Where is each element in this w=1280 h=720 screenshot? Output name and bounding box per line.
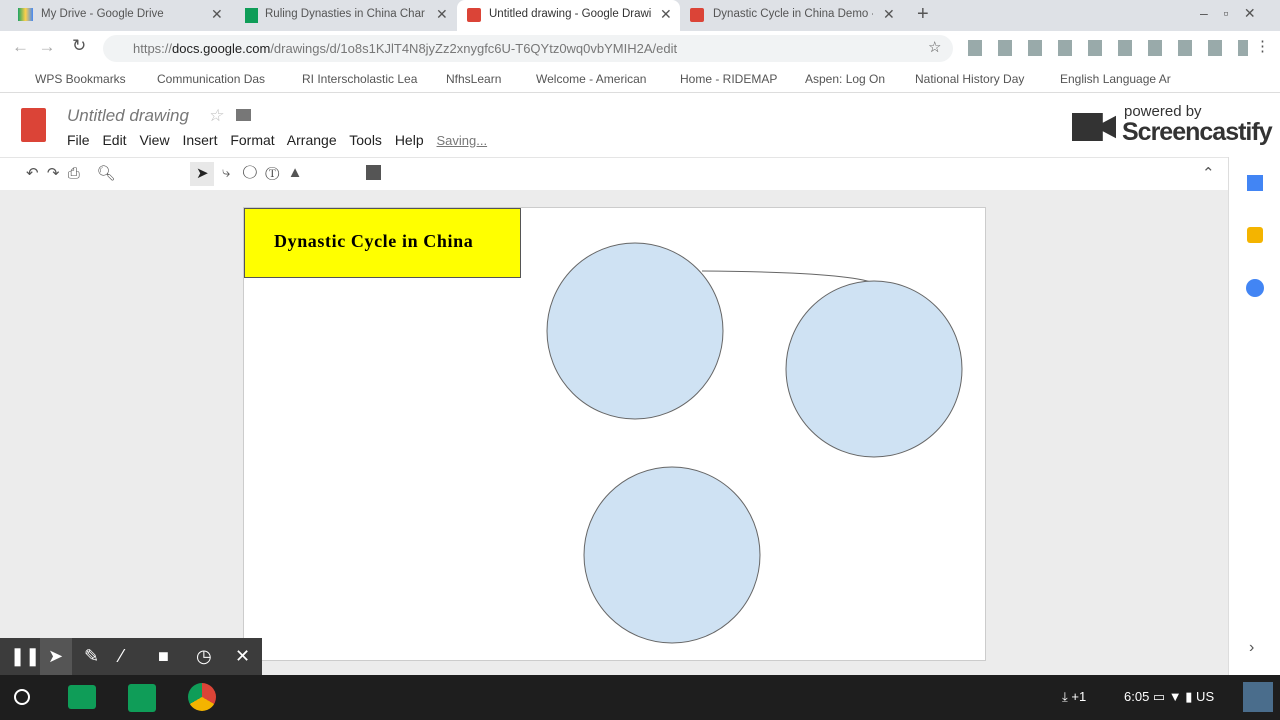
circle 1: [547, 243, 723, 419]
address bar: ← →: [12, 37, 55, 56]
docs header: [0, 93, 1280, 157]
toolbar: [0, 157, 1228, 190]
toolbar: ➤: [196, 165, 209, 182]
screencastify toolbar: ⁄: [120, 646, 123, 666]
tab: active: [457, 0, 680, 31]
taskbar: [0, 675, 1280, 720]
right side panel: ›: [1249, 639, 1254, 656]
circle 3: [584, 467, 760, 643]
bookmarks bar: National History Day: [915, 72, 1024, 86]
title box: [244, 208, 521, 278]
tab bar: [0, 0, 1280, 31]
address bar: ↻: [72, 36, 86, 55]
tab: ruling dynasties: Ruling Dynasties in China Chart: [265, 8, 425, 20]
bookmarks bar: Home - RIDEMAP: [680, 72, 777, 86]
title: untitled drawing: Untitled drawing ☆: [67, 106, 223, 125]
screencastify toolbar: ➤: [48, 646, 63, 666]
screencastify toolbar: ◷: [196, 646, 212, 666]
tab: active: ✕: [660, 6, 672, 22]
tab: my drive: My Drive - Google Drive: [41, 8, 164, 20]
bookmarks bar: Welcome - American: [536, 72, 646, 86]
screencastify toolbar: ✕: [235, 646, 250, 666]
bookmarks bar: WPS Bookmarks: [35, 72, 126, 86]
menu: File Edit View Insert Format Arrange Tools Help Saving...: [67, 132, 487, 148]
icon: drawings logo: [21, 108, 46, 142]
screencastify watermark: [1072, 103, 1272, 146]
toolbar: ⌃: [1202, 165, 1215, 182]
taskbar: 6:05 ▭ ▼ ▮ US: [1124, 689, 1214, 704]
address bar: ☆: [928, 39, 941, 56]
address bar: https://docs.google.com/drawings/d/1o8s1KJlT4N8jyZz2xnygfc6U-T6QYtz0wq0vbYMIH2A/edit: [133, 41, 677, 56]
title box: Dynastic Cycle in China: [274, 231, 473, 251]
toolbar: ⤷ ◯ Ⓣ ▲: [222, 164, 302, 181]
tab: dynastic cycle demo: ✕: [883, 6, 895, 22]
bookmarks bar: Communication Das: [157, 72, 265, 86]
screencastify watermark: powered by: [1124, 103, 1202, 120]
bookmarks bar: RI Interscholastic Lea: [302, 72, 417, 86]
tab: dynastic cycle demo: [690, 6, 895, 22]
screencastify toolbar: ✎: [84, 646, 99, 666]
screencastify toolbar: ■: [158, 646, 169, 666]
tab bar: – ▫ ✕: [1200, 5, 1256, 21]
bookmarks bar: NfhsLearn: [446, 72, 501, 86]
bookmarks bar: [0, 65, 1280, 93]
canvas: [243, 207, 986, 661]
bookmarks bar: Aspen: Log On: [805, 72, 885, 86]
address bar: [0, 31, 1280, 65]
connector line: [702, 271, 874, 283]
screencastify toolbar: ❚❚: [10, 646, 40, 666]
taskbar: ⤓ +1: [1062, 689, 1086, 704]
toolbar: ↶ ↷ ⎙ 🔍︎: [26, 165, 116, 182]
right side panel: [1228, 157, 1280, 675]
diagram: circles: [546, 242, 962, 644]
screencastify watermark: Screencastify: [1122, 118, 1272, 146]
tab: ruling dynasties: [245, 6, 448, 23]
screencastify toolbar: [0, 638, 262, 675]
tab bar: +: [917, 3, 929, 25]
tab: my drive: [18, 6, 223, 22]
tab: active: Untitled drawing - Google Drawir: [489, 8, 651, 20]
bookmarks bar: English Language Ar: [1060, 72, 1171, 86]
tab: my drive: ✕: [211, 6, 223, 22]
tab: ruling dynasties: ✕: [436, 6, 448, 22]
address bar: ⋮: [1255, 38, 1270, 55]
circle 2: [786, 281, 962, 457]
